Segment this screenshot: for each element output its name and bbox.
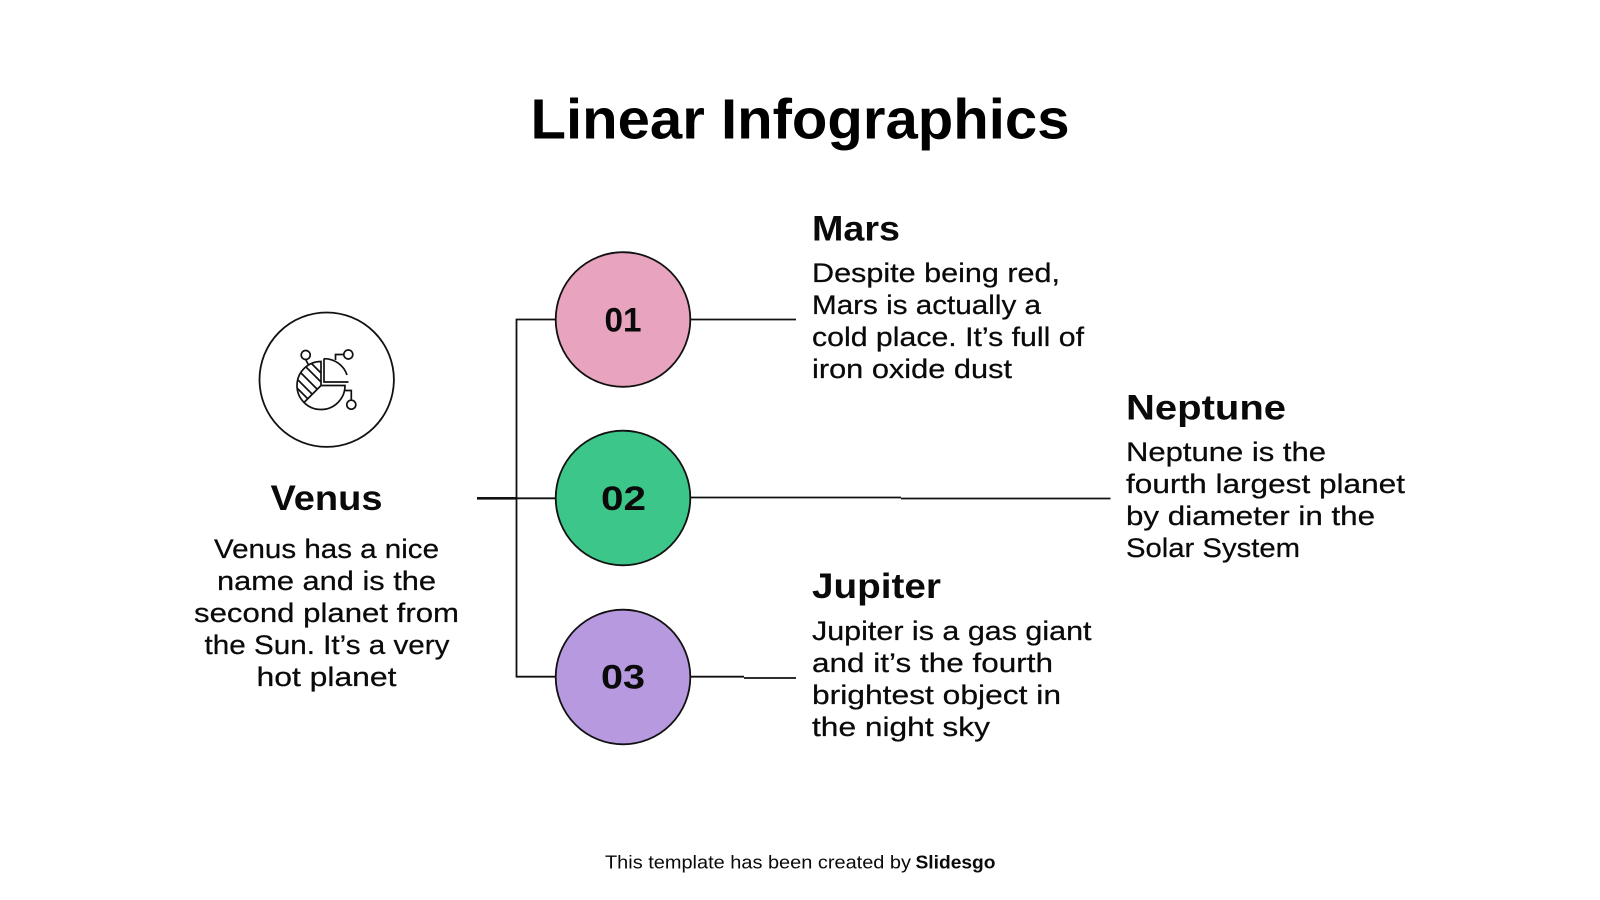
circle 02: 02 — [601, 480, 646, 518]
circle 03: 03 — [601, 658, 645, 696]
text block: Jupiter description: Jupiter is a gas giant — [812, 616, 1092, 646]
text block: Venus description: hot planet — [256, 662, 397, 692]
text block: Neptune description: Solar System — [1126, 533, 1300, 563]
heading: Venus: Venus — [270, 479, 382, 518]
text block: Neptune description: Neptune is the — [1126, 437, 1326, 467]
text block: Neptune description: fourth largest planet — [1126, 469, 1406, 499]
circle 01: 01 — [604, 302, 642, 340]
heading: Mars: Mars — [812, 210, 900, 248]
text block: Mars description: cold place. It’s full of — [812, 322, 1085, 352]
connector lines — [477, 320, 1110, 678]
heading: Jupiter: Jupiter — [812, 567, 941, 606]
icon: pie chart in circle — [260, 312, 394, 447]
text block: Mars description — [812, 258, 1085, 384]
panel: Neptune — [1126, 388, 1406, 563]
circle 02 — [556, 431, 690, 565]
text block: Mars description: Despite being red, — [812, 258, 1060, 288]
title: Linear Infographics — [530, 88, 1070, 152]
text block: Jupiter description — [812, 616, 1092, 742]
text block: Venus description: the Sun. It’s a very — [204, 630, 450, 660]
text block: Mars description: Mars is actually a — [812, 290, 1042, 320]
text block: Neptune description: by diameter in the — [1126, 501, 1375, 531]
text block: Jupiter description: the night sky — [812, 712, 991, 742]
text block: Venus description: second planet from — [194, 598, 459, 628]
heading: Neptune: Neptune — [1126, 388, 1286, 428]
text block: Venus description: name and is the — [217, 566, 436, 596]
panel: Mars — [812, 210, 1085, 384]
text block: Venus description — [194, 534, 459, 692]
footer credit: This template has been created by — [605, 852, 911, 872]
text block: Mars description: iron oxide dust — [812, 354, 1013, 384]
circle 01 — [556, 252, 690, 387]
footer credit: Slidesgo — [916, 852, 996, 872]
text block: Venus description: Venus has a nice — [214, 534, 439, 564]
panel: Jupiter — [812, 567, 1092, 742]
text block: Jupiter description: and it’s the fourth — [812, 648, 1053, 678]
circle 03 — [556, 610, 690, 744]
panel: Venus — [194, 312, 459, 692]
text block: Neptune description — [1126, 437, 1406, 563]
text block: Jupiter description: brightest object in — [812, 680, 1061, 710]
